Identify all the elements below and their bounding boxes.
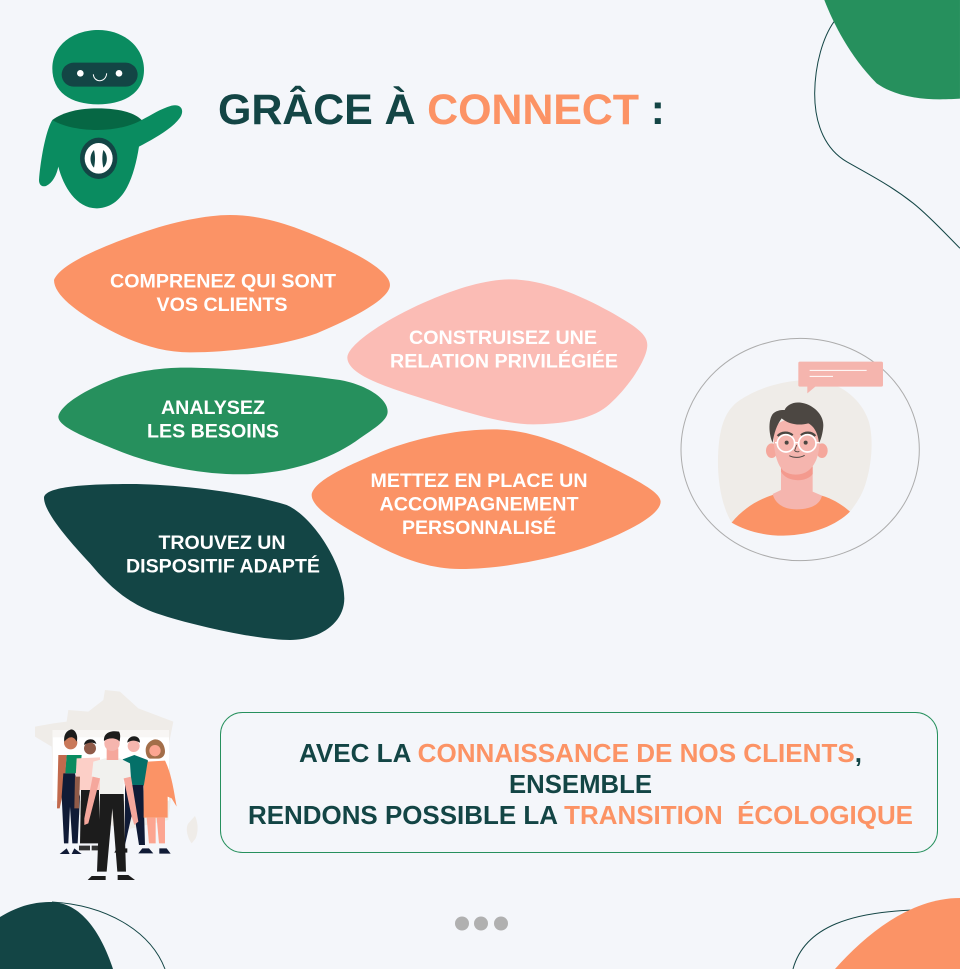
title: GRÂCE À CONNECT : — [218, 85, 665, 134]
decoration: bottom right orange shape — [793, 898, 960, 969]
panel: trouvez un dispositif adapté: DISPOSITIF ADAPTÉ — [126, 554, 320, 578]
panel: construisez une relation privilégiée — [347, 279, 647, 424]
panel: comprenez qui sont vos clients: COMPRENEZ QUI SONT — [110, 270, 336, 292]
panel: trouvez un dispositif adapté: TROUVEZ UN — [158, 532, 286, 554]
panel: construisez une relation privilégiée: CONSTRUISEZ UNE — [409, 327, 597, 349]
panel: comprenez qui sont vos clients — [54, 215, 390, 352]
callout: conclusion: RENDONS POSSIBLE LA TRANSITION ÉCOLOGIQUE — [248, 801, 913, 830]
panel: analysez les besoins — [58, 368, 388, 474]
panel: comprenez qui sont vos clients: VOS CLIENTS — [156, 294, 288, 316]
panel: trouvez un dispositif adapté — [44, 484, 344, 640]
illustration: group of people over map of France — [35, 690, 198, 880]
pagination dots — [455, 916, 508, 930]
decoration: top right green shape — [815, 0, 960, 248]
callout: conclusion — [220, 712, 938, 852]
panel: construisez une relation privilégiée: RELATION PRIVILÉGIÉE — [390, 350, 618, 372]
icon: robot mascot — [39, 30, 182, 208]
panel: mettez en place un accompagnement personnalisé: PERSONNALISÉ — [402, 516, 556, 539]
panel: analysez les besoins: LES BESOINS — [147, 420, 279, 442]
icon: man with glasses in circle — [681, 338, 919, 561]
panel: mettez en place un accompagnement personnalisé: METTEZ EN PLACE UN — [370, 470, 588, 492]
callout: conclusion: ENSEMBLE — [509, 771, 652, 799]
panel: analysez les besoins: ANALYSEZ — [161, 397, 265, 419]
callout: conclusion: AVEC LA CONNAISSANCE DE NOS CLIENTS , — [299, 740, 862, 768]
decoration: bottom left dark shape — [0, 902, 165, 969]
panel: mettez en place un accompagnement personnalisé: ACCOMPAGNEMENT — [380, 494, 579, 516]
panel: mettez en place un accompagnement personnalisé — [312, 429, 661, 569]
